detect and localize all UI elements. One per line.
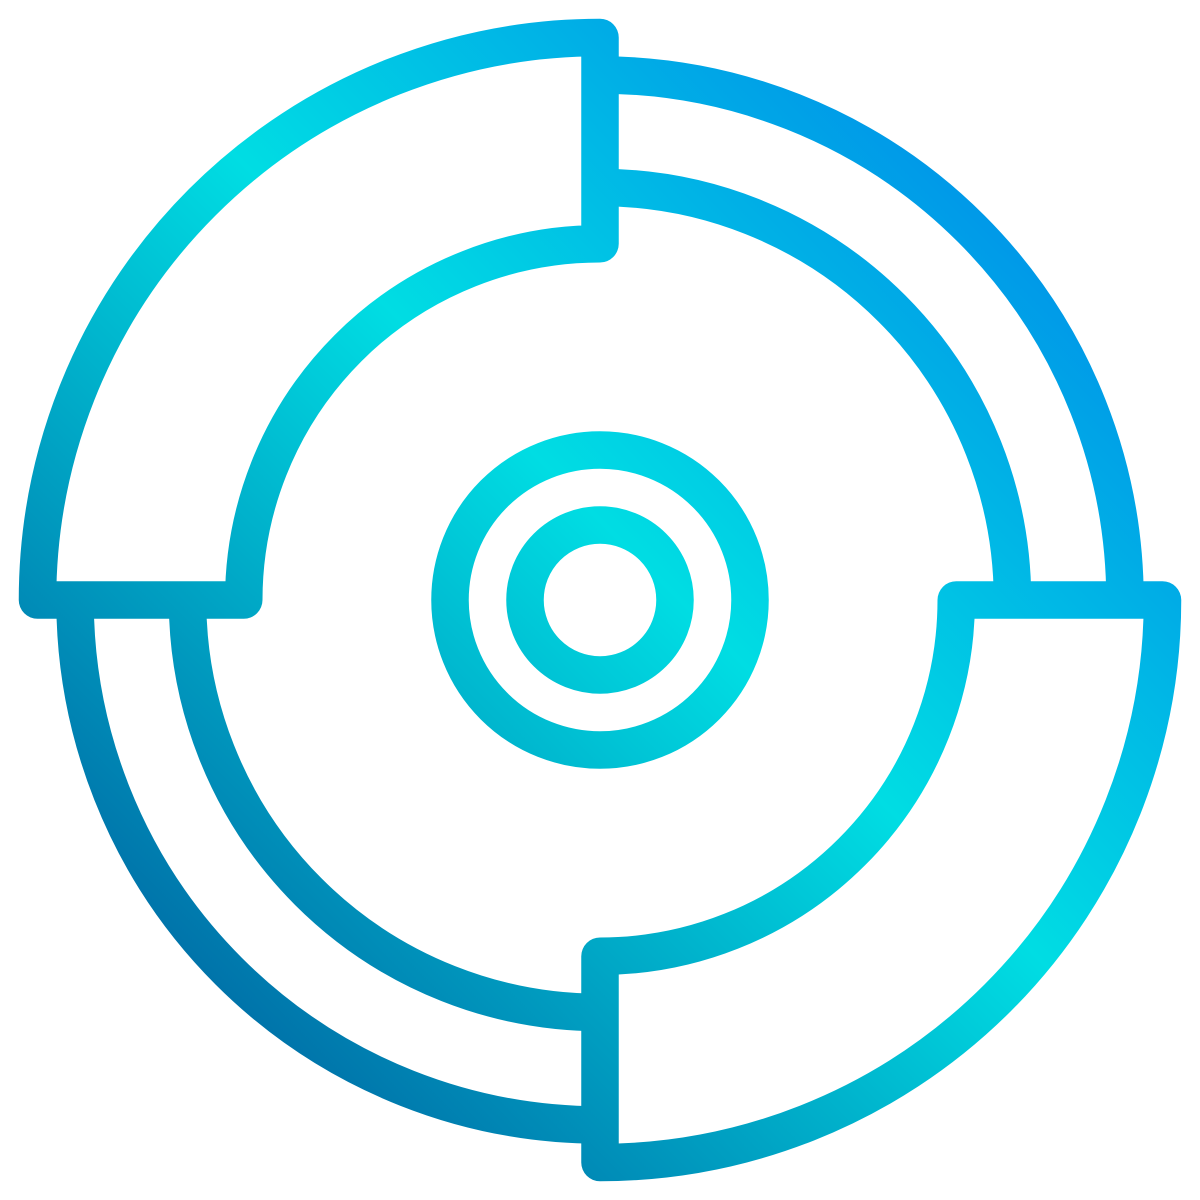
segment: top-left wide ring band: [38, 38, 600, 600]
center outer circle: [450, 450, 750, 750]
segment: top-right thin ring band: [600, 75, 1125, 600]
center inner circle: [525, 525, 675, 675]
segment: bottom-right wide ring band: [600, 600, 1162, 1162]
segment: bottom-left thin ring band: [75, 600, 600, 1125]
